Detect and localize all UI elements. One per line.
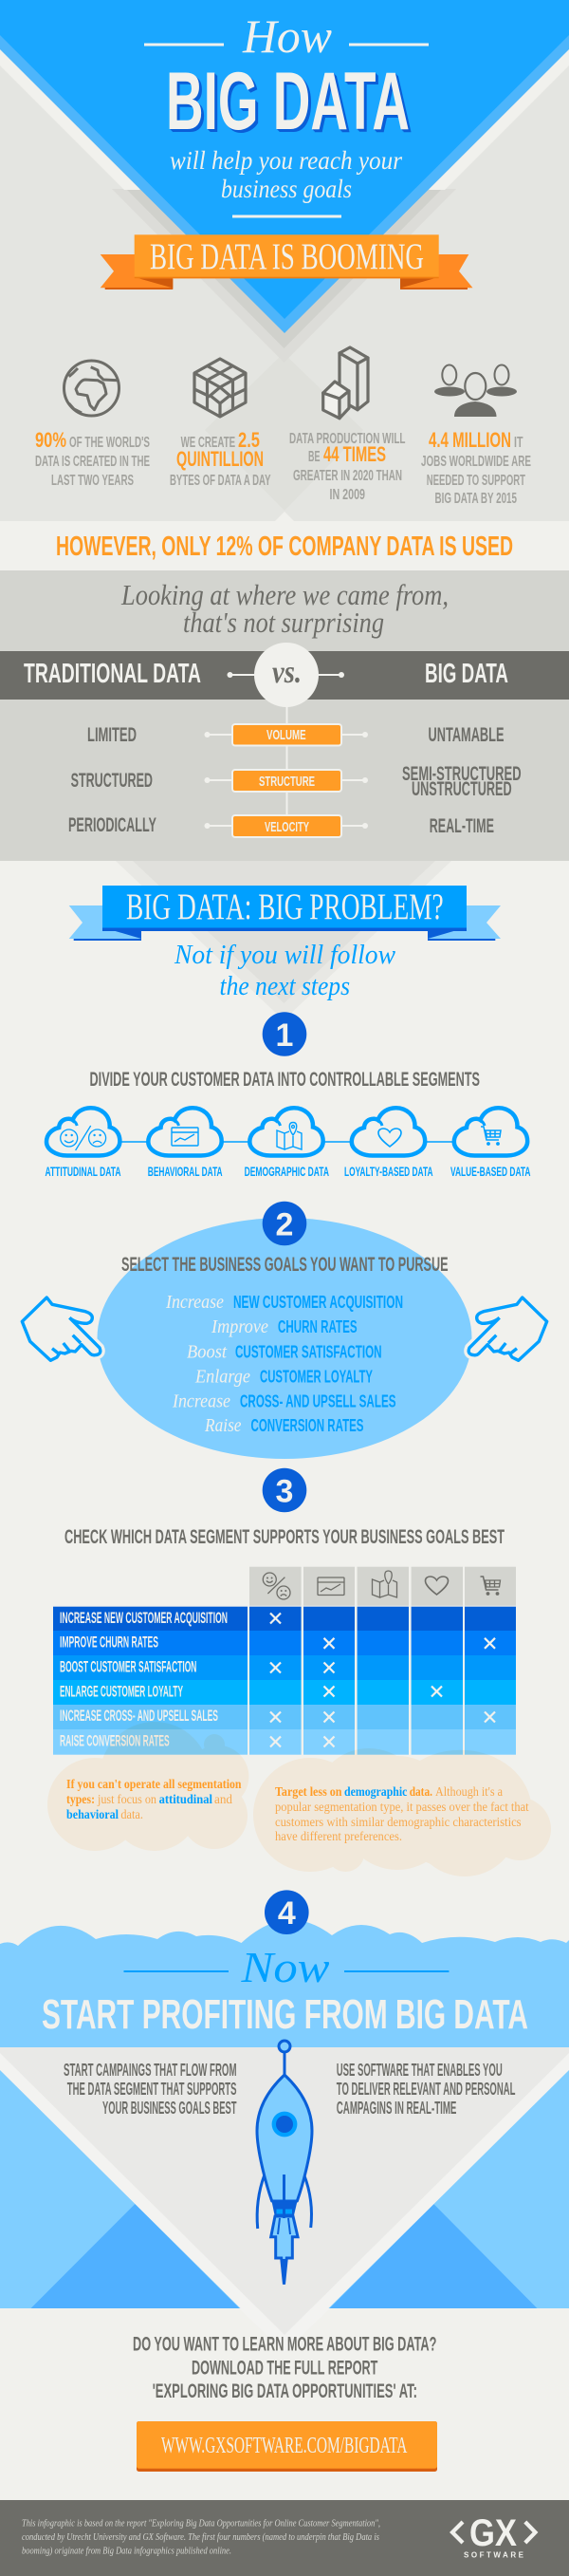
panel: traditional vs big data — [0, 570, 569, 861]
row: velocity: PERIODICALLY — [68, 814, 156, 836]
stat: 44 times: DATA PRODUCTION WILL — [289, 431, 406, 447]
segment: demographic data: DEMOGRAPHIC DATA — [245, 1164, 329, 1179]
text: software — [337, 2061, 515, 2118]
goal: customer loyalty — [194, 1367, 373, 1388]
segment: attitudinal data: ATTITUDINAL DATA — [46, 1164, 121, 1179]
stat: 44 times: GREATER IN 2020 THAN — [293, 468, 402, 484]
badge: step 4 — [265, 1890, 309, 1934]
heading: big data: BIG DATA — [425, 659, 508, 689]
table header icons — [249, 1567, 516, 1606]
row: volume — [87, 724, 505, 746]
stat: 90 percent: OF THE WORLD'S — [69, 435, 150, 451]
segment: behavioral data: BEHAVIORAL DATA — [148, 1164, 223, 1179]
callout text: segmentation: behavioral — [66, 1808, 119, 1822]
icon: left pointing hand — [22, 1297, 101, 1360]
segment: demographic data — [245, 1108, 329, 1179]
segment: loyalty-based data: LOYALTY-BASED DATA — [344, 1164, 432, 1179]
title: BIG DATA: BIG DATA — [166, 56, 410, 147]
logo: GX Software: GX — [469, 2512, 517, 2554]
callout text: segmentation: just focus on — [97, 1793, 156, 1807]
text: source note — [22, 2518, 380, 2557]
segment: loyalty-based data — [344, 1108, 432, 1179]
table: data segments by business goals — [53, 1567, 516, 1755]
text: not if you will follow — [174, 940, 396, 1001]
stat: 2.5 quintillion: WE CREATE — [181, 435, 235, 451]
row labels: IMPROVE CHURN RATES — [60, 1634, 158, 1652]
row labels: BOOST CUSTOMER SATISFACTION — [60, 1659, 196, 1676]
goal: new customer acquisition: Increase — [165, 1292, 224, 1313]
ribbon: big data big problem: BIG DATA: BIG PROBLEM? — [126, 887, 444, 927]
badge: step 3: 3 — [276, 1473, 293, 1509]
icon: globe — [64, 361, 119, 416]
goal: churn rates — [211, 1316, 358, 1337]
panel: big problem background wedge — [116, 861, 451, 1020]
badge: step 1: 1 — [276, 1017, 293, 1054]
goal: conversion rates — [204, 1415, 364, 1436]
badge: step 2 — [263, 1202, 306, 1245]
stat: 4.4 million: IT — [514, 435, 523, 451]
panel: header hero — [0, 0, 569, 521]
callout text: segmentation: attitudinal — [159, 1793, 212, 1807]
callout text: segmentation — [66, 1778, 242, 1822]
callout text: demographic — [275, 1785, 529, 1844]
ribbon: big data is booming — [101, 234, 472, 289]
callout text: demographic: Although it's a — [435, 1785, 504, 1800]
goal: new customer acquisition: NEW CUSTOMER ACQUISITION — [233, 1293, 403, 1312]
check marks — [270, 1614, 495, 1746]
goal: customer satisfaction — [187, 1342, 382, 1363]
row labels: RAISE CONVERSION RATES — [60, 1733, 170, 1750]
goal: cross and upsell sales: CROSS- AND UPSELL SALES — [240, 1392, 396, 1411]
row: volume: LIMITED — [87, 724, 137, 746]
row labels: INCREASE NEW CUSTOMER ACQUISITION — [60, 1610, 228, 1627]
callout text: demographic: have different preferences. — [275, 1830, 402, 1844]
logo: GX Software: SOFTWARE — [464, 2551, 524, 2560]
callout text: segmentation: and — [214, 1793, 232, 1807]
stat: 2.5 quintillion: BYTES OF DATA A DAY — [170, 473, 271, 489]
segment: attitudinal data — [46, 1108, 121, 1179]
goal: customer loyalty: CUSTOMER LOYALTY — [260, 1367, 373, 1386]
segment: value-based data — [450, 1108, 531, 1179]
stat: 44 times — [289, 431, 406, 503]
text: source note: conducted by Utrecht University and GX Software. The first four numbers (named to underpin that Big Data is — [22, 2531, 379, 2543]
logo: GX Software — [452, 2512, 535, 2560]
button: website link: WWW.GXSOFTWARE.COM/BIGDATA — [161, 2434, 408, 2458]
callout text: demographic: Target less on — [275, 1785, 342, 1800]
stat: 4.4 million — [421, 428, 531, 507]
title: Now: Now — [240, 1943, 330, 1991]
stat: 90 percent: DATA IS CREATED IN THE — [35, 454, 150, 470]
goal: cross and upsell sales — [172, 1391, 396, 1412]
panel: footer — [0, 2500, 569, 2576]
badge: step 3 — [263, 1468, 306, 1512]
ribbon: big data big problem — [69, 886, 501, 941]
goal: conversion rates: CONVERSION RATES — [250, 1416, 364, 1435]
row: volume: UNTAMABLE — [429, 724, 505, 746]
text: campaigns: START CAMPAINGS THAT FLOW FROM — [64, 2061, 237, 2080]
callout text: demographic: popular segmentation type, it passes over the fact that — [275, 1801, 529, 1815]
text: not if you will follow: the next steps — [220, 971, 350, 1001]
text: campaigns: THE DATA SEGMENT THAT SUPPORTS — [67, 2080, 237, 2099]
stat: 90 percent: LAST TWO YEARS — [51, 473, 134, 489]
goal: customer satisfaction: CUSTOMER SATISFACTION — [235, 1343, 382, 1362]
badge: vs — [254, 643, 319, 707]
row: structure — [71, 763, 522, 800]
stat: 4.4 million: 4.4 MILLION — [429, 428, 511, 452]
text: looking at where we came from — [120, 578, 449, 639]
stat: 2.5 quintillion — [170, 428, 271, 489]
icon: right pointing hand — [468, 1297, 547, 1360]
row: velocity: REAL-TIME — [430, 815, 494, 837]
stat: 2.5 quintillion: 2.5 — [238, 428, 260, 452]
stat: 44 times: IN 2009 — [330, 487, 365, 503]
panel: business goals ellipse — [97, 1218, 472, 1459]
title: BIG DATA: BIG DATA — [167, 57, 411, 148]
row labels: INCREASE CROSS- AND UPSELL SALES — [60, 1708, 218, 1725]
goal: churn rates: CHURN RATES — [278, 1317, 358, 1336]
row 1 — [53, 1607, 516, 1631]
stat: 90 percent — [35, 428, 150, 489]
row: structure: STRUCTURE — [259, 774, 315, 790]
callout text: segmentation: If you can't operate all segmentation — [66, 1778, 242, 1792]
stat: 90 percent: 90% — [35, 428, 66, 452]
segment: behavioral data — [148, 1108, 223, 1179]
goal: cross and upsell sales: Increase — [172, 1391, 230, 1412]
text: learn more: DOWNLOAD THE FULL REPORT — [192, 2358, 377, 2380]
stat: 44 times: 44 TIMES — [323, 442, 386, 466]
badge: step 1 — [263, 1012, 306, 1056]
icon: rocket — [257, 2041, 312, 2285]
goal: churn rates: Improve — [211, 1316, 268, 1337]
row labels: ENLARGE CUSTOMER LOYALTY — [60, 1684, 183, 1701]
ribbon: big data is booming: BIG DATA IS BOOMING — [150, 236, 424, 277]
text: not if you will follow: Not if you will follow — [174, 940, 396, 970]
callout text: segmentation: types: — [66, 1793, 95, 1807]
title: BIG DATA: BIG DATA — [169, 59, 413, 150]
heading: only 12 percent used — [0, 521, 569, 570]
text: source note: booming) originate from Big Data infographics published online. — [22, 2546, 231, 2557]
icon: data cubes — [194, 359, 246, 417]
text: campaigns — [64, 2061, 237, 2118]
goal: customer satisfaction: Boost — [187, 1342, 227, 1363]
callout cloud: right — [253, 1748, 551, 1876]
row 2 — [53, 1631, 516, 1655]
icon: people — [434, 364, 517, 417]
title: How — [144, 9, 429, 63]
badge: step 2: 2 — [276, 1207, 293, 1243]
badge: vs: vs. — [272, 655, 302, 690]
text: learn more — [133, 2334, 436, 2402]
title: How: How — [242, 9, 332, 63]
row 6 — [53, 1729, 516, 1755]
goal: customer loyalty: Enlarge — [194, 1367, 250, 1388]
heading: traditional data: TRADITIONAL DATA — [24, 659, 201, 689]
row: volume: VOLUME — [266, 727, 306, 743]
callout text: demographic: data. — [410, 1785, 432, 1800]
stat: 44 times: BE — [308, 449, 321, 465]
text: learn more: 'EXPLORING BIG DATA OPPORTUNITIES' AT: — [153, 2380, 417, 2402]
subtitle: will help you reach your — [170, 146, 402, 175]
panel: start profiting — [0, 1920, 569, 2354]
callout text: segmentation: data. — [120, 1808, 143, 1822]
title: BIG DATA — [166, 56, 413, 150]
goal: conversion rates: Raise — [204, 1415, 242, 1436]
callout text: demographic: demographic — [344, 1785, 407, 1800]
subtitle — [170, 146, 402, 218]
row 5 — [53, 1705, 516, 1729]
text: campaigns: YOUR BUSINESS GOALS BEST — [102, 2099, 237, 2118]
goal: new customer acquisition — [165, 1292, 403, 1313]
row: structure: STRUCTURED — [71, 770, 153, 792]
text: looking at where we came from: Looking at where we came from, — [120, 578, 449, 611]
text: looking at where we came from: that's not surprising — [183, 606, 384, 639]
row: velocity — [68, 814, 494, 837]
stat: 2.5 quintillion: QUINTILLION — [176, 447, 264, 471]
text: software: CAMPAGINS IN REAL-TIME — [337, 2099, 456, 2118]
callout text: demographic: customers with similar demographic characteristics — [275, 1816, 522, 1830]
row: velocity: VELOCITY — [265, 819, 309, 835]
icon: growing bars — [323, 347, 368, 419]
subtitle: business goals — [221, 175, 352, 203]
stat: 4.4 million: BIG DATA BY 2015 — [434, 491, 517, 507]
button: website link — [137, 2421, 437, 2472]
row labels — [60, 1610, 228, 1750]
row 3 — [53, 1655, 516, 1680]
row 4 — [53, 1680, 516, 1705]
callout cloud: left — [47, 1722, 248, 1851]
title: BIG DATA: BIG DATA — [168, 58, 412, 149]
text: source note: This infographic is based on the report "Exploring Big Data Opportunities for Online Customer Segmentation", — [22, 2518, 380, 2529]
badge: step 4: 4 — [278, 1895, 296, 1932]
